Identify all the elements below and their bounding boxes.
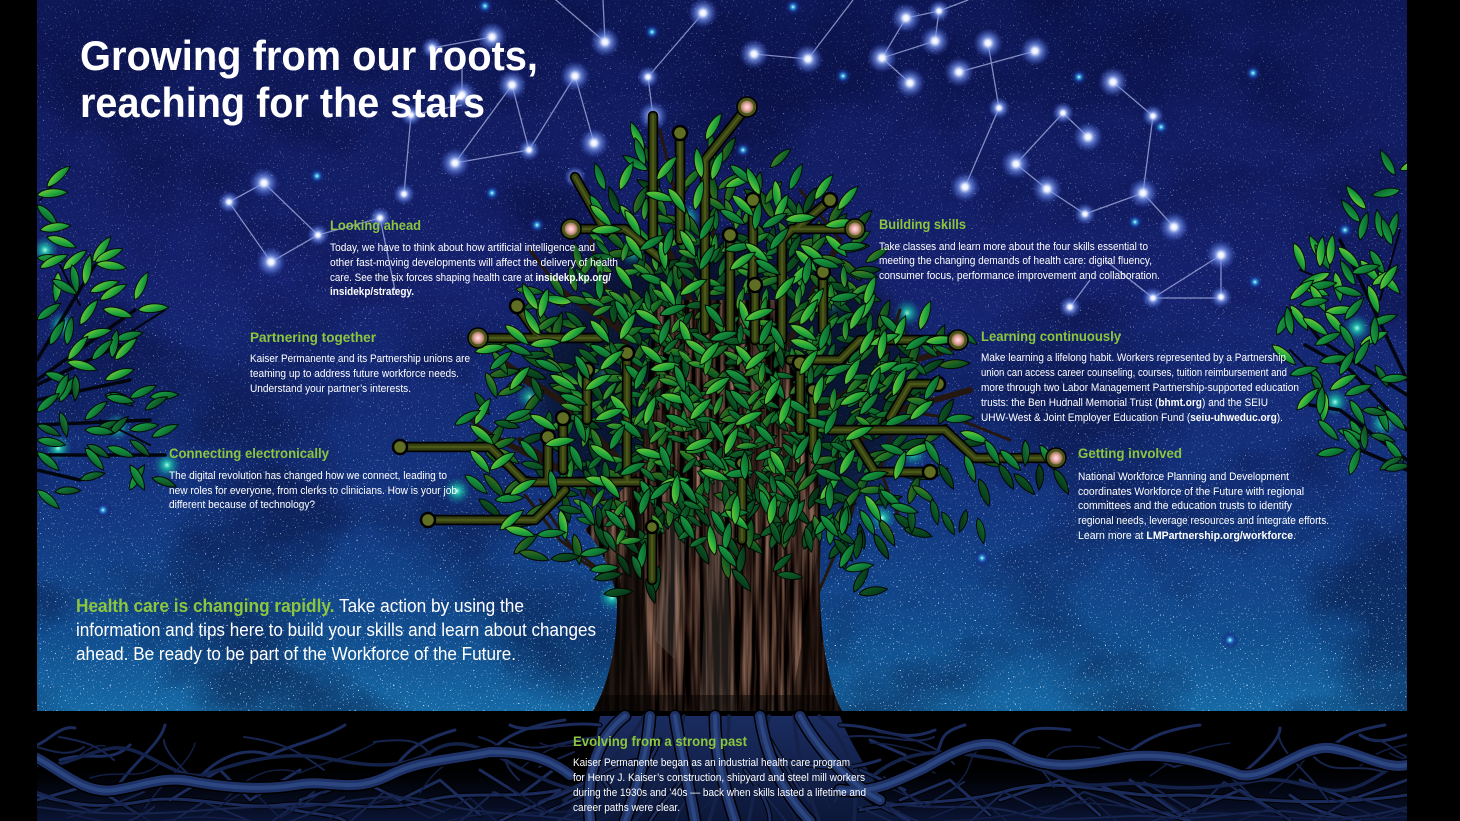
text block: Learning continuously: union can access career counseling, courses, tuition reimbursement and — [981, 367, 1287, 379]
text block: Looking ahead: Today, we have to think about how artificial intelligence and — [330, 242, 595, 254]
text block: Connecting electronically: different because of technology? — [169, 499, 315, 511]
text block: Learning continuously: UHW-West & Joint Employer Education Fund (seiu-uhweduc.org). — [981, 412, 1283, 424]
text block: Looking ahead: care. See the six forces shaping health care at insidekp.kp.org/ — [330, 272, 611, 284]
callout: Health care is changing rapidly — [76, 595, 596, 664]
text block: Getting involved — [1078, 446, 1329, 542]
leaves — [453, 111, 1058, 580]
text block: Getting involved: coordinates Workforce of the Future with regional — [1078, 486, 1304, 498]
circuit end caps — [393, 126, 945, 533]
organic branches — [470, 130, 1010, 600]
text block: Evolving from a strong past: for Henry J. Kaiser’s construction, shipyard and steel mill workers — [573, 772, 865, 784]
text block: Building skills: consumer focus, performance improvement and collaboration. — [879, 270, 1160, 282]
text block: Learning continuously: more through two Labor Management Partnership-supported education — [981, 382, 1299, 394]
canopy shadow — [535, 240, 915, 540]
text block: Building skills: meeting the changing demands of health care: digital fluency, — [879, 255, 1152, 267]
circuit branches — [400, 107, 1056, 580]
text block: Evolving from a strong past — [573, 734, 866, 814]
text block: Building skills: Building skills — [879, 217, 966, 232]
text block: Learning continuously: Make learning a lifelong habit. Workers represented by a Partnership — [981, 352, 1286, 364]
text block: Partnering together: teaming up to address future workforce needs. — [250, 368, 459, 380]
text block: Building skills: Take classes and learn more about the four skills essential to — [879, 241, 1148, 253]
left side tree — [34, 163, 180, 512]
text block: Looking ahead — [330, 218, 618, 298]
text block: Evolving from a strong past: Evolving from a strong past — [573, 734, 747, 749]
text block: Getting involved: Learn more at LMPartnership.org/workforce. — [1078, 530, 1296, 542]
callout: Health care is changing rapidly: Health care is changing rapidly. Take action by using the — [76, 595, 524, 616]
text block: Partnering together: Partnering together — [250, 330, 377, 345]
ground and roots — [37, 711, 1437, 821]
text block: Learning continuously — [981, 329, 1299, 424]
text block: Partnering together: Kaiser Permanente and its Partnership unions are — [250, 353, 470, 365]
text block: Connecting electronically: new roles for everyone, from clerks to clinicians. How is your job — [169, 485, 457, 497]
right side tree — [1270, 148, 1430, 476]
trunk — [585, 300, 842, 711]
text block: Connecting electronically: The digital revolution has changed how we connect, leading to — [169, 470, 447, 482]
text block: Connecting electronically — [169, 446, 457, 511]
fireflies — [31, 204, 1397, 611]
text block: Building skills — [879, 217, 1160, 282]
text block: Partnering together — [250, 330, 470, 395]
text block: Evolving from a strong past: during the 1930s and ’40s — back when skills lasted a lifetime and — [573, 787, 866, 799]
deep foliage layers — [437, 76, 1081, 640]
text block: Connecting electronically: Connecting electronically — [169, 446, 329, 461]
pink circuit nodes — [468, 97, 1066, 468]
text block: Looking ahead: Looking ahead — [330, 218, 421, 233]
text block: Evolving from a strong past: career paths were clear. — [573, 802, 680, 814]
text block: Getting involved: National Workforce Planning and Development — [1078, 471, 1289, 483]
title: reaching for the stars — [80, 79, 485, 126]
text block: Looking ahead: insidekp/strategy. — [330, 286, 414, 298]
text block: Getting involved: Getting involved — [1078, 446, 1182, 461]
title — [80, 32, 538, 126]
text block: Evolving from a strong past: Kaiser Permanente began as an industrial health care program — [573, 757, 850, 769]
constellations — [94, 0, 1354, 649]
callout: Health care is changing rapidly: ahead. Be ready to be part of the Workforce of the Future. — [76, 643, 516, 664]
tree — [393, 76, 1081, 711]
text block: Getting involved: committees and the education trusts to identify — [1078, 500, 1293, 512]
text block: Partnering together: Understand your partner’s interests. — [250, 383, 411, 395]
callout: Health care is changing rapidly: information and tips here to build your skills and learn about changes — [76, 619, 596, 640]
title: Growing from our roots, — [80, 32, 538, 79]
text block: Learning continuously: Learning continuously — [981, 329, 1121, 344]
text block: Looking ahead: other fast-moving developments will affect the delivery of health — [330, 257, 618, 269]
text block: Learning continuously: trusts: the Ben Hudnall Memorial Trust (bhmt.org) and the SEIU — [981, 397, 1268, 409]
text block: Getting involved: regional needs, leverage resources and integrate efforts. — [1078, 515, 1329, 527]
